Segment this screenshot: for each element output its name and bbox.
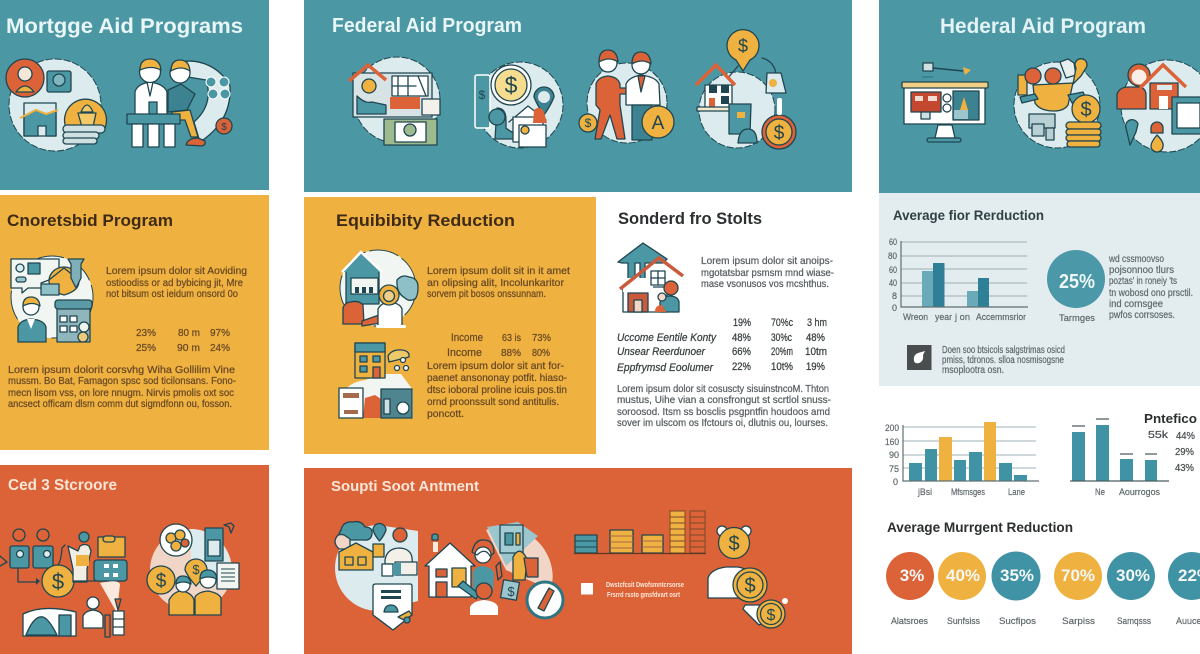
panel: soupti soot antment — [304, 468, 852, 654]
icon: white house and people: $ — [507, 584, 515, 599]
stat: 30 percent: Samqsss — [1117, 616, 1151, 627]
text block: note: Doen soo btsicols salgstrimas osicd — [942, 345, 1065, 356]
bar chart: teal and yellow bars: 0 — [893, 477, 898, 488]
stat: 35 percent: 35% — [1000, 566, 1034, 585]
heading: federal aid: Federal Aid Program — [332, 15, 522, 37]
icon: advisor meeting — [127, 59, 232, 147]
stat: 3 percent: 3% — [900, 566, 924, 585]
bar chart: teal and yellow bars: 90 — [889, 450, 899, 461]
text block: body: Lorem ipsum dolor sit ant for- — [427, 360, 564, 372]
icon: monitor dashboard — [902, 63, 988, 142]
table: figures: 97% — [210, 327, 230, 339]
text block: intro — [427, 265, 570, 300]
icon: plate and people — [147, 523, 239, 615]
table: figures: 66% — [732, 346, 751, 358]
stats: pntefico: 43% — [1175, 462, 1194, 474]
stat: 70 percent: 70% — [1061, 566, 1095, 585]
panel: ced 3 stcroore — [0, 465, 269, 654]
icon: dollar search — [475, 62, 563, 148]
text block: body — [617, 383, 831, 429]
stat: 25 percent: 25% — [1059, 271, 1095, 293]
stat: 40 percent — [938, 552, 986, 627]
icon: two people shaking hands — [579, 50, 674, 143]
text block: intro — [106, 265, 247, 300]
text block: side note — [1108, 254, 1193, 321]
table: figures: 10t% — [771, 361, 793, 373]
text block: intro: sorvem pit bosos onssunnam. — [427, 288, 546, 300]
table: figures: 24% — [210, 342, 230, 354]
text block: intro: ostioodiss or ad bybicing jit, Mre — [106, 277, 243, 289]
table: figures: 90 m — [177, 342, 200, 354]
bar chart: teal and yellow bars: Lane — [1008, 487, 1025, 498]
panel: hederal aid program — [879, 0, 1200, 193]
heading: ced 3: Ced 3 Stcroore — [8, 477, 117, 494]
text block: body: paenet ansononay potfit. hiaso- — [427, 372, 567, 384]
icon: workers and coin — [0, 529, 127, 637]
stat: 70 percent — [1054, 552, 1102, 627]
heading: average fior: Average fior Rerduction — [893, 207, 1044, 223]
text block: side note: pojsonnoo tlurs — [1109, 265, 1174, 276]
text block: body: mustus, Uihe vian a consfrongut st scrtlol snuss- — [617, 394, 831, 406]
icon: building and documents — [339, 343, 413, 418]
stat: 25 percent: Tarmges — [1059, 313, 1095, 324]
panel: federal aid program — [304, 0, 852, 192]
icon: plate and people: $ — [192, 562, 200, 577]
bar chart: grouped bars: Accemmsrior — [976, 312, 1026, 323]
stat: 3 percent: Alatsroes — [891, 616, 928, 627]
icon: two people shaking hands: A — [652, 113, 665, 134]
panel: cnoretsbid program — [0, 195, 269, 450]
bar chart: grouped bars — [888, 237, 1028, 323]
table: figures: Eppfrymsd Eoolumer — [617, 362, 714, 374]
bar chart: grouped bars: year — [935, 312, 952, 323]
bar chart: teal and yellow bars: Mfsmsges — [951, 487, 985, 498]
table: figures: 30%c — [771, 332, 792, 344]
table: figures: 23% — [136, 327, 156, 339]
heading: hederal aid: Hederal Aid Program — [940, 15, 1146, 38]
text block: body: Lorem ipsum dolor sit cosuscty sisuinstncoM. Thton — [617, 383, 829, 395]
stat: 40 percent: 40% — [946, 566, 980, 585]
heading: average murrgent reduction: Average Murrgent Reduction — [887, 519, 1073, 535]
icon: white house and people — [425, 522, 563, 618]
text block: body: ornd proonssult sond antitulis. — [427, 396, 559, 408]
table: figures: 48% — [806, 332, 825, 344]
text block: body: poncott. — [427, 408, 464, 420]
bar chart: teal and yellow bars: jBsi — [917, 487, 932, 498]
table: figures: 25% — [136, 342, 156, 354]
stats: pntefico — [1144, 411, 1197, 474]
stat: 35 percent — [992, 552, 1040, 627]
table: income — [447, 332, 551, 359]
bar chart: grouped bars: 8 — [892, 291, 897, 302]
bar chart: grouped bars: j on — [954, 312, 970, 323]
text block: side note: pwfos corrsoses. — [1109, 310, 1175, 321]
stat circles row — [886, 552, 1200, 627]
icon: stacked bars — [574, 511, 706, 554]
icon: dollar search: $ — [505, 72, 518, 98]
bar chart: grouped bars: 0 — [892, 303, 897, 314]
legend: square and note — [581, 582, 684, 599]
text block: body: dtsc ioboral proline icuis pos.tin — [427, 384, 567, 396]
stat: 25 percent — [1047, 250, 1105, 324]
stats: pntefico: 29% — [1175, 446, 1194, 458]
text block: body: mussm. Bo Bat, Famagon spsc sod ticilonsans. Fono- — [8, 375, 236, 387]
text block: body — [427, 360, 567, 420]
heading: equibibity: Equibibity Reduction — [336, 211, 515, 230]
text block: body: mecn lisom vss, on lore nnugm. Nirvis pmolis oxt soc — [8, 387, 234, 399]
bar chart: teal and yellow bars: 200 — [885, 423, 899, 434]
text block: body: Lorem ipsum dolorit corsvhg Wiha Gollilim Vine — [8, 364, 235, 376]
table: figures: Unsear Reerdunoer — [617, 346, 706, 358]
icon: house, person and calendar — [1117, 60, 1200, 152]
icon: person with coins: $ — [767, 607, 776, 624]
stat: 35 percent: Sucfipos — [999, 616, 1036, 627]
table: income: 63 is — [502, 332, 521, 344]
table: figures: 70%c — [771, 317, 793, 329]
text block: note: msoplootra osn. — [942, 365, 1004, 376]
stat: 3 percent — [886, 552, 934, 627]
icon: person with coin stack — [1014, 59, 1101, 148]
panel: sonderd fro stolts — [617, 209, 834, 429]
table: figures: 22% — [732, 361, 751, 373]
icon: house and bills — [349, 57, 440, 145]
text block: note — [942, 345, 1065, 376]
icon: workers and coin: $ — [52, 569, 64, 594]
icon: finance cluster — [6, 59, 106, 151]
legend: square and note: Frsrrd rssto gmsfdvart osrt — [607, 592, 681, 599]
bar chart: grouped bars: Wreon — [903, 312, 928, 323]
heading: cnoretsbid: Cnoretsbid Program — [7, 211, 173, 230]
text block: body: ancsect officam dlsm comm dut sigmdfonn ou, fosson. — [8, 398, 232, 410]
table: income: Income — [447, 347, 482, 359]
stats: pntefico: 55k — [1148, 429, 1169, 441]
stat: 30 percent: 30% — [1116, 566, 1150, 585]
text block: side note: ind cornsgee — [1109, 299, 1163, 310]
icon: house with coins: $ — [738, 36, 748, 56]
table: figures: 19% — [806, 361, 825, 373]
text block: intro: Lorem ipsum dolit sit in it amet — [427, 265, 570, 277]
icon: house and family — [618, 243, 683, 312]
stat: 40 percent: Sunfsiss — [947, 616, 980, 627]
icon: person with coins: $ — [728, 533, 740, 555]
table: figures: 10tm — [805, 346, 827, 358]
table: figures: 20%m — [771, 346, 793, 358]
icon: person with coin stack: $ — [1080, 99, 1092, 121]
text block: intro: Lorem ipsum dolor sit anoips- — [701, 255, 833, 267]
text block: intro: an olipsing alit, Incolunkaritor — [427, 277, 564, 289]
table: figures: 19% — [733, 317, 751, 329]
stats: pntefico: 44% — [1176, 430, 1195, 442]
text block: side note: wd cssmoovso — [1108, 254, 1164, 265]
table: figures: 3 hm — [807, 317, 827, 329]
bar chart: grouped bars: 40 — [889, 278, 897, 289]
text block: body: soroosod. Itsm ss bosclis psgpntfin houdoos amd — [617, 406, 830, 418]
icon: house and doctor — [340, 250, 418, 328]
bar chart: grouped bars: 60 — [889, 237, 897, 248]
panel: average fior reduction — [879, 193, 1200, 386]
icon: adviser and building — [11, 256, 93, 342]
table: figures: 80 m — [178, 327, 200, 339]
icon: note badge — [907, 345, 932, 370]
text block: intro: mase vsonusos vos mcshthus. — [701, 278, 829, 290]
text block: intro: not bitsum ost ieidum onsord 0o — [106, 288, 238, 300]
heading: soupti: Soupti Soot Antment — [331, 478, 479, 495]
text block: side note: poztas' in roneiy 'ts — [1109, 276, 1177, 287]
table: figures: Uccome Eentile Konty — [617, 332, 717, 344]
icon: house with coins: $ — [774, 123, 785, 144]
table: income: 88% — [501, 347, 521, 359]
panel: mortgage aid programs — [0, 0, 269, 190]
stat: 22 percent — [1168, 552, 1200, 627]
text block: body: sover im ulscom os Ifctours oi, dlutnis ou, lourses. — [617, 417, 828, 429]
panel: equibibity reduction — [304, 197, 596, 454]
bar chart: teal and yellow bars: 75 — [889, 464, 899, 475]
bar chart: teal bars with caps: Ne — [1095, 487, 1105, 498]
icon: two people shaking hands: $ — [585, 116, 592, 130]
bar chart: grouped bars: 60 — [889, 265, 897, 276]
heading: mortgage aid: Mortgge Aid Programs — [6, 15, 243, 38]
icon: plate and people: $ — [156, 571, 167, 592]
icon: person with coins — [708, 526, 788, 628]
table: figures — [136, 327, 230, 354]
table: income: 73% — [532, 332, 551, 344]
table: figures: 48% — [732, 332, 751, 344]
table: figures — [617, 317, 827, 374]
stat: 70 percent: Sarpiss — [1062, 616, 1095, 627]
bar chart: teal bars with caps — [1070, 419, 1169, 498]
icon: neighbourhood cluster — [335, 522, 418, 630]
icon: person with coins: $ — [744, 575, 756, 597]
legend: square and note: Dwstcfcsit Dwofsmntcrsorse — [606, 582, 684, 589]
icon: advisor meeting: $ — [221, 122, 227, 133]
heading: sonderd: Sonderd fro Stolts — [618, 209, 762, 228]
text block: intro: Lorem ipsum dolor sit Aoviding — [106, 265, 247, 277]
bar chart: teal and yellow bars: 160 — [885, 437, 899, 448]
bar chart: teal bars with caps: Aourrogos — [1119, 487, 1160, 498]
icon: house with coins — [696, 30, 796, 149]
bar chart: teal and yellow bars — [885, 422, 1039, 498]
table: income: Income — [451, 332, 483, 344]
table: income: 80% — [532, 347, 550, 359]
bar chart: grouped bars: 80 — [888, 251, 897, 262]
text block: intro — [701, 255, 834, 290]
stat: 30 percent — [1107, 552, 1155, 627]
heading: pntefico: Pntefico — [1144, 411, 1197, 426]
text block: body — [8, 364, 236, 410]
text block: intro: mgotatsbar psmsm mnd wiase- — [701, 267, 834, 279]
icon: dollar search: $ — [479, 88, 486, 102]
text block: note: pmiss, tdronos. slloa nosmisogsne — [942, 355, 1064, 366]
